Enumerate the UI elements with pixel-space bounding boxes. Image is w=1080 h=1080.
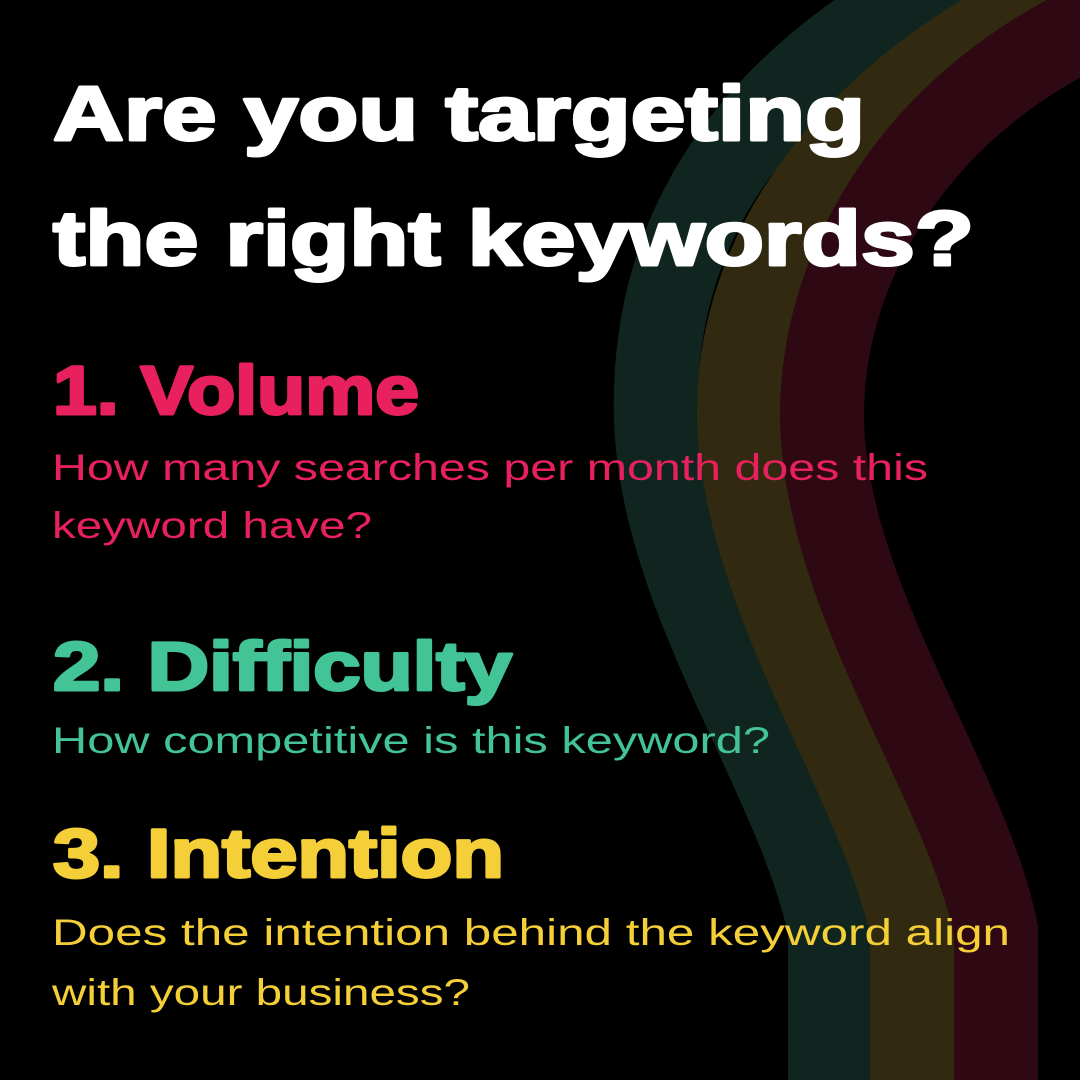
section 1: volume: keyword have? xyxy=(52,505,372,546)
band: green xyxy=(656,0,1010,1080)
heading: 3. Intention: 3. Intention xyxy=(53,815,504,892)
section 3: intention xyxy=(51,815,1010,1013)
title: the right keywords? xyxy=(53,196,974,282)
section 1: volume xyxy=(52,352,928,546)
body text: How many searches per month does this xyxy=(52,447,928,488)
band: olive xyxy=(739,0,1080,1080)
heading: 2. Difficulty: 2. Difficulty xyxy=(53,628,512,705)
section 3: intention: with your business? xyxy=(51,972,470,1013)
section 2: difficulty xyxy=(52,628,770,761)
decorative wave bands xyxy=(656,0,1080,1080)
body text: Does the intention behind the keyword align xyxy=(52,912,1010,953)
heading: 1. Volume: 1. Volume xyxy=(53,352,419,429)
body text: How competitive is this keyword? xyxy=(52,720,770,761)
title xyxy=(53,71,974,282)
band: maroon xyxy=(822,0,1080,1080)
title: Are you targeting xyxy=(53,71,865,157)
